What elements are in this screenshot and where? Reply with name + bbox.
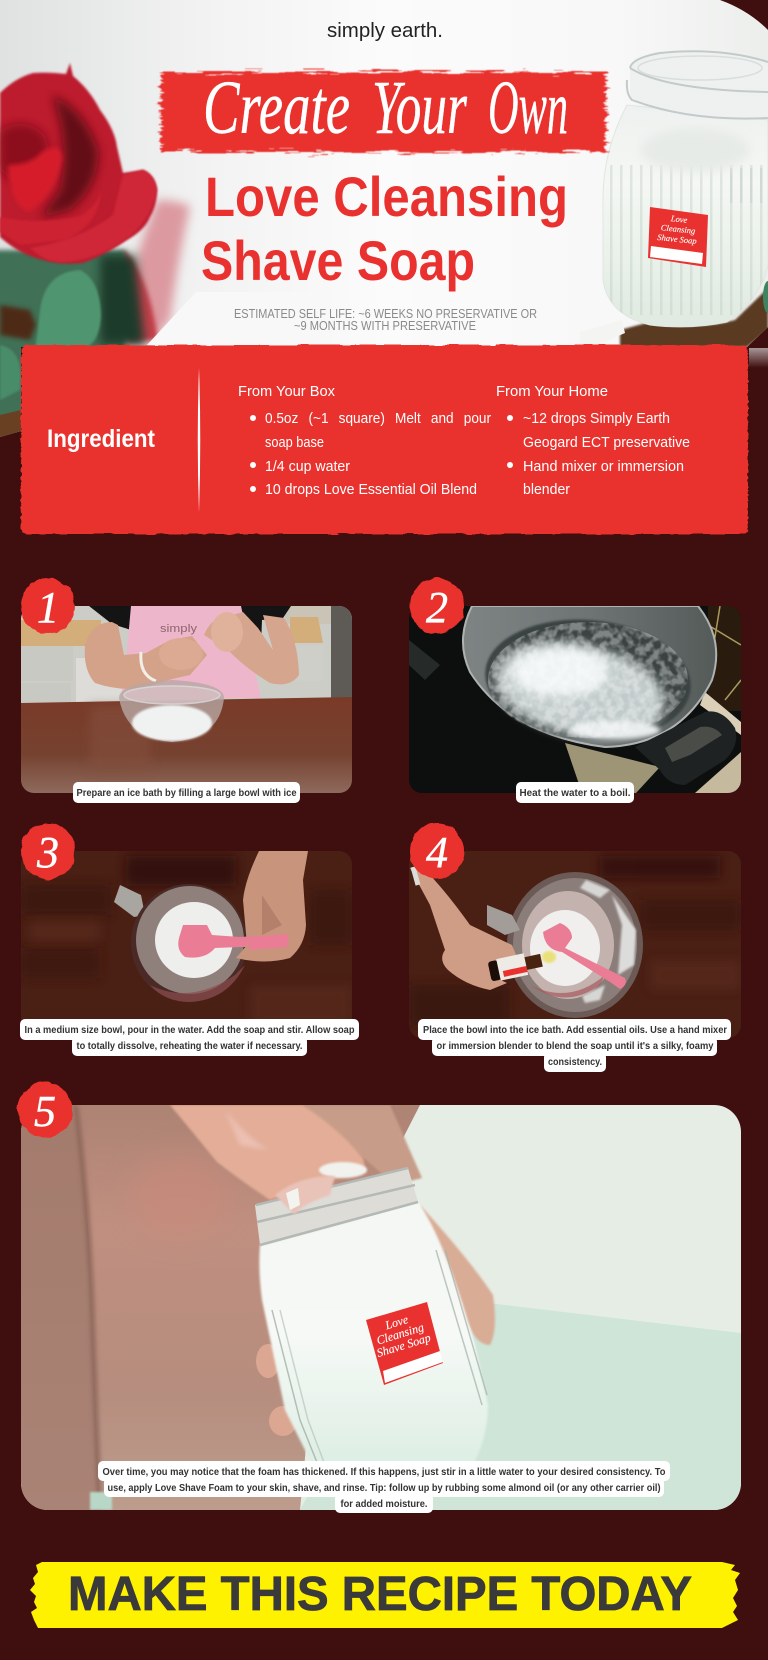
script heading: Create [203,66,350,150]
caption 2: Heat the water to a boil. [520,787,631,799]
step 5 [18,1082,741,1513]
jar label: Love [382,1312,410,1333]
caption 5 [98,1461,670,1513]
number badge 3 [21,823,75,879]
list: from your home [496,383,690,498]
list: from your box: soap base [265,434,324,451]
photo: adding essential oil [409,851,741,1038]
number badge 5 [18,1082,72,1138]
number badge 5: 5 [34,1087,56,1136]
caption 4: consistency. [548,1056,602,1068]
header photo banner [0,0,768,450]
photo: boiling water pot [409,606,741,793]
number badge 4 [410,823,464,879]
jar label: Love [669,213,688,225]
list: from your home: Geogard ECT preservative [523,434,690,451]
jar label: Shave Soap [657,232,697,246]
list: from your box [238,383,491,498]
caption 3: to totally dissolve, reheating the water if necessary. [76,1040,303,1052]
heading: love cleansing shave soap: Love Cleansing [205,165,568,228]
list: from your home: Hand mixer or immersion [523,458,684,475]
panel background [21,345,748,534]
number badge 4: 4 [426,828,448,877]
photo: soap jar on wood table [602,50,768,347]
heading: love cleansing shave soap: Shave Soap [201,229,475,292]
list: from your box: 1/4 cup water [265,458,350,475]
step 4 [409,823,741,1072]
number badge 3: 3 [36,828,59,877]
step 2 [409,578,741,803]
list: from your box: 10 drops Love Essential Oil Blend [265,481,477,498]
photo: red rose with leaves [0,62,195,437]
list: from your box: 0.5oz (~1 square) Melt and pour [265,410,491,427]
brush stroke [161,72,606,152]
caption 1 [73,782,300,803]
caption 3 [20,1019,359,1056]
caption 1: Prepare an ice bath by filling a large bowl with ice [76,787,297,799]
caption 4 [418,1019,731,1072]
jar label: Shave Soap [375,1330,432,1360]
script heading: Own [488,66,568,150]
jar label: Cleansing [660,222,696,236]
photo: stirring soap in bowl [21,851,352,1038]
jar label: Cleansing [375,1320,425,1348]
banner text: MAKE THIS RECIPE TODAY [68,1568,692,1621]
jar label [366,1302,443,1385]
list: from your home: ~12 drops Simply Earth [523,410,670,427]
number badge 2: 2 [426,583,448,632]
caption 5: for added moisture. [340,1498,428,1510]
number badge 1: 1 [37,583,59,632]
caption 5: Over time, you may notice that the foam has thickened. If this happens, just stir in a little water to your desired consistency. To [102,1466,666,1478]
title banner: create your own [161,66,606,152]
shelf life note [234,307,537,333]
photo: foam jar held by hand [21,1105,741,1510]
list: from your home: From Your Home [496,383,608,400]
caption 5: use, apply Love Shave Foam to your skin, shave, and rinse. Tip: follow up by rubbing some almond oil (or any other carrier oil) [108,1482,660,1494]
list: from your box: From Your Box [238,383,335,400]
list: from your home: blender [523,481,570,498]
number badge 1 [21,578,75,634]
caption 4: or immersion blender to blend the soap until it's a silky, foamy [436,1040,714,1052]
divider [198,368,200,512]
photo: ice bath bowl [21,606,352,793]
photo: ice bath bowl: simply [160,623,198,635]
panel: ingredients [21,345,748,534]
heading: love cleansing shave soap [201,165,568,292]
jar label [648,207,708,267]
ingredient heading: Ingredient [47,425,156,453]
header corner fade [749,348,768,368]
step 1 [21,578,352,803]
caption 2 [516,782,634,803]
script heading: Your [372,66,467,150]
caption 4: Place the bowl into the ice bath. Add essential oils. Use a hand mixer [423,1024,727,1036]
step 3 [20,823,359,1056]
call to action banner [30,1562,740,1628]
shelf life note: ~9 MONTHS WITH PRESERVATIVE [294,319,476,333]
shelf life note: ESTIMATED SELF LIFE: ~6 WEEKS NO PRESERVATIVE OR [234,307,537,321]
logo: simply earth: simply earth. [327,20,443,42]
script heading [203,66,568,150]
number badge 2 [410,578,464,634]
caption 3: In a medium size bowl, pour in the water. Add the soap and stir. Allow soap [24,1024,354,1036]
yellow brush stroke [30,1562,740,1628]
